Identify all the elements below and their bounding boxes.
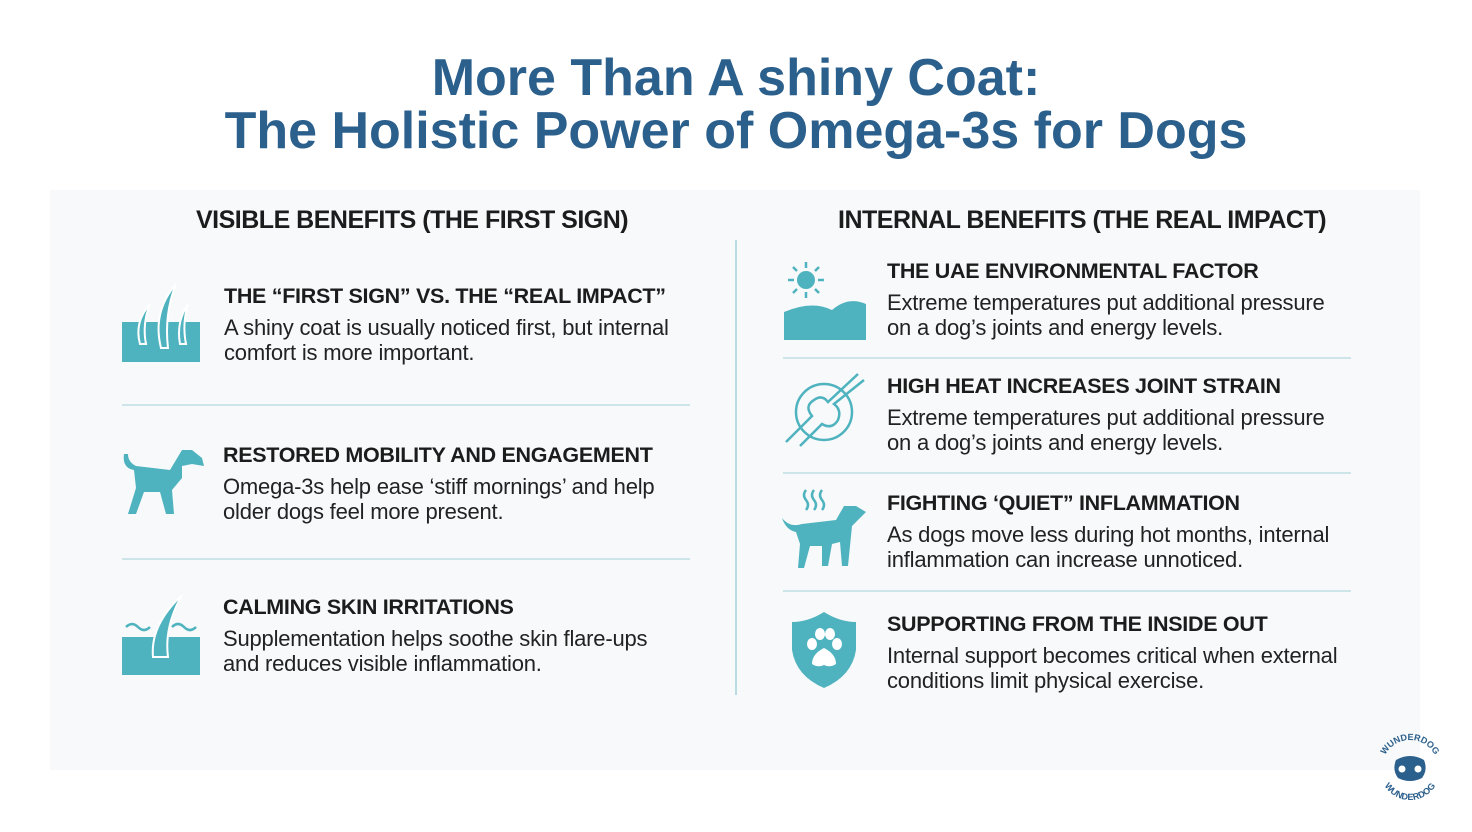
item: skin: CALMING SKIN IRRITATIONS xyxy=(223,595,514,619)
heading: visible benefits: VISIBLE BENEFITS (THE FIRST SIGN) xyxy=(196,206,628,234)
item: inflammation xyxy=(887,491,1329,572)
item: mobility: Omega-3s help ease ‘stiff mornings’ and help xyxy=(223,474,654,499)
item: first sign xyxy=(224,284,669,365)
icon: hot dog xyxy=(782,489,866,568)
heading: internal benefits: INTERNAL BENEFITS (THE REAL IMPACT) xyxy=(838,206,1326,234)
vertical divider xyxy=(735,240,737,695)
item: UAE: THE UAE ENVIRONMENTAL FACTOR xyxy=(887,259,1258,283)
item: inside out xyxy=(887,612,1337,693)
logo: WUNDERDOG xyxy=(1380,734,1439,754)
item: skin xyxy=(223,595,647,676)
item: first sign: A shiny coat is usually noticed first, but internal xyxy=(224,315,669,340)
item: mobility xyxy=(223,443,654,524)
title xyxy=(225,49,1247,160)
icon: shield paw xyxy=(792,612,856,688)
icon: skin xyxy=(122,600,200,675)
item: heat: Extreme temperatures put additional pressure xyxy=(887,405,1325,430)
logo: WUNDERDOG xyxy=(1385,782,1435,800)
title: More Than A shiny Coat: xyxy=(432,49,1040,107)
item: first sign: THE “FIRST SIGN” VS. THE “REAL IMPACT” xyxy=(224,284,666,308)
item: mobility: older dogs feel more present. xyxy=(223,499,503,524)
title: The Holistic Power of Omega-3s for Dogs xyxy=(225,102,1247,160)
item: inside out: Internal support becomes critical when external xyxy=(887,643,1337,668)
item: skin: and reduces visible inflammation. xyxy=(223,651,542,676)
icon: sun landscape xyxy=(784,262,866,340)
item: inflammation: As dogs move less during hot months, internal xyxy=(887,522,1329,547)
item: UAE: Extreme temperatures put additional pressure xyxy=(887,290,1325,315)
item: heat: HIGH HEAT INCREASES JOINT STRAIN xyxy=(887,374,1281,398)
item: skin: Supplementation helps soothe skin flare-ups xyxy=(223,626,647,651)
item: first sign: comfort is more important. xyxy=(224,340,474,365)
item: heat xyxy=(887,374,1325,455)
background panel xyxy=(50,190,1420,770)
item: mobility: RESTORED MOBILITY AND ENGAGEMENT xyxy=(223,443,653,467)
logo xyxy=(1380,734,1439,800)
icon: hair follicles xyxy=(122,290,200,362)
item: heat: on a dog’s joints and energy levels. xyxy=(887,430,1223,455)
item: inflammation: inflammation can increase unnoticed. xyxy=(887,547,1243,572)
item: UAE: on a dog’s joints and energy levels. xyxy=(887,315,1223,340)
icon: joint xyxy=(785,373,865,447)
icon: walking dog xyxy=(124,450,204,514)
item: inside out: SUPPORTING FROM THE INSIDE OUT xyxy=(887,612,1267,636)
item: UAE xyxy=(887,259,1325,340)
item: inflammation: FIGHTING ‘QUIET” INFLAMMATION xyxy=(887,491,1240,515)
item: inside out: conditions limit physical exercise. xyxy=(887,668,1204,693)
